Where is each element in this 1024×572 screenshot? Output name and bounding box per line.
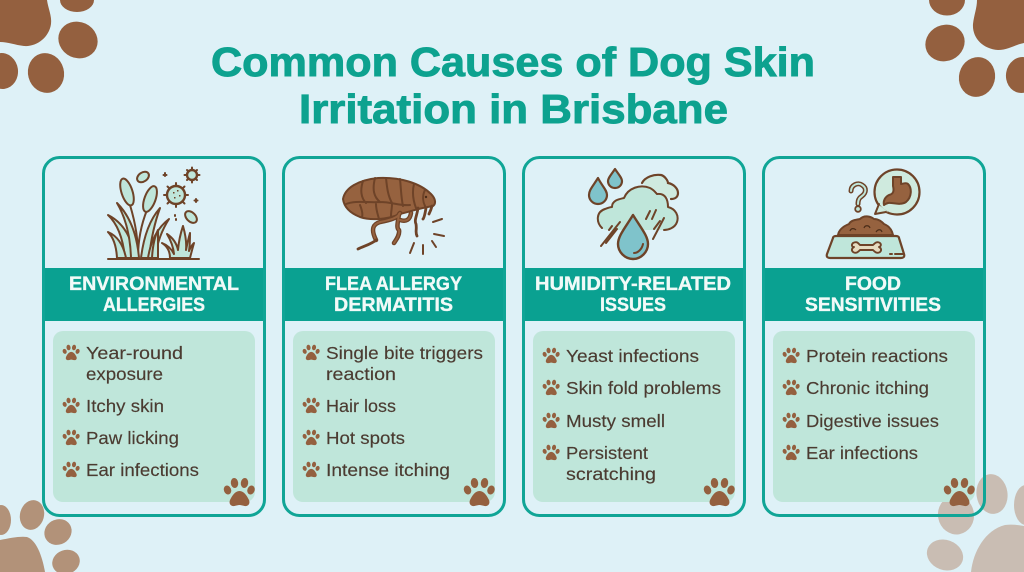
symptom list: scratching <box>566 464 656 484</box>
heading band: ENVIRONMENTAL <box>69 274 239 295</box>
symptom list: Skin fold problems <box>566 378 721 398</box>
decorative paw: bottom right <box>922 472 1024 572</box>
symptom list: Yeast infections <box>566 346 699 366</box>
heading band <box>525 268 743 321</box>
symptom list: Persistent <box>566 443 648 463</box>
panel: humidity-related issues <box>524 158 744 516</box>
icon: flea <box>343 178 444 254</box>
symptom list: Chronic itching <box>806 378 929 398</box>
decorative paw: top left <box>0 0 104 97</box>
symptom list: Ear infections <box>806 443 918 463</box>
symptom list: Year-round <box>86 343 183 363</box>
heading band: ISSUES <box>600 295 666 316</box>
symptom list: Digestive issues <box>806 411 939 431</box>
heading band: HUMIDITY-RELATED <box>535 274 731 295</box>
icon: food bowl, question mark and stomach bubble <box>827 170 920 258</box>
symptom list: exposure <box>86 364 163 384</box>
panel: flea allergy dermatitis <box>284 158 504 516</box>
heading band <box>285 268 503 321</box>
panel: environmental allergies <box>44 158 264 516</box>
title <box>211 39 815 132</box>
icon: cattails, grass and allergens <box>108 168 200 259</box>
heading band: SENSITIVITIES <box>805 295 941 316</box>
panel: food sensitivities <box>764 158 984 516</box>
icon: clouds and water drops <box>589 169 678 259</box>
symptom list: Protein reactions <box>806 346 948 366</box>
symptom list: Single bite triggers <box>326 343 483 363</box>
symptom list <box>773 331 976 506</box>
heading band: DERMATITIS <box>334 295 453 316</box>
heading band: FOOD <box>845 274 901 295</box>
symptom list: Hot spots <box>326 428 405 448</box>
symptom list <box>533 331 736 506</box>
symptom list: Hair loss <box>326 396 396 416</box>
symptom list <box>53 331 256 506</box>
heading band: FLEA ALLERGY <box>325 274 462 295</box>
heading band <box>45 268 263 321</box>
symptom list: reaction <box>326 364 396 384</box>
symptom list: Paw licking <box>86 428 179 448</box>
symptom list: Musty smell <box>566 411 665 431</box>
symptom list: Itchy skin <box>86 396 164 416</box>
title: Irritation in Brisbane <box>299 86 728 132</box>
symptom list <box>293 331 496 506</box>
heading band <box>765 268 983 321</box>
symptom list: Intense itching <box>326 460 450 480</box>
title: Common Causes of Dog Skin <box>211 39 815 85</box>
symptom list: Ear infections <box>86 460 199 480</box>
decorative paw: top right <box>919 0 1024 101</box>
decorative paw: bottom left <box>0 497 83 572</box>
heading band: ALLERGIES <box>103 295 205 316</box>
